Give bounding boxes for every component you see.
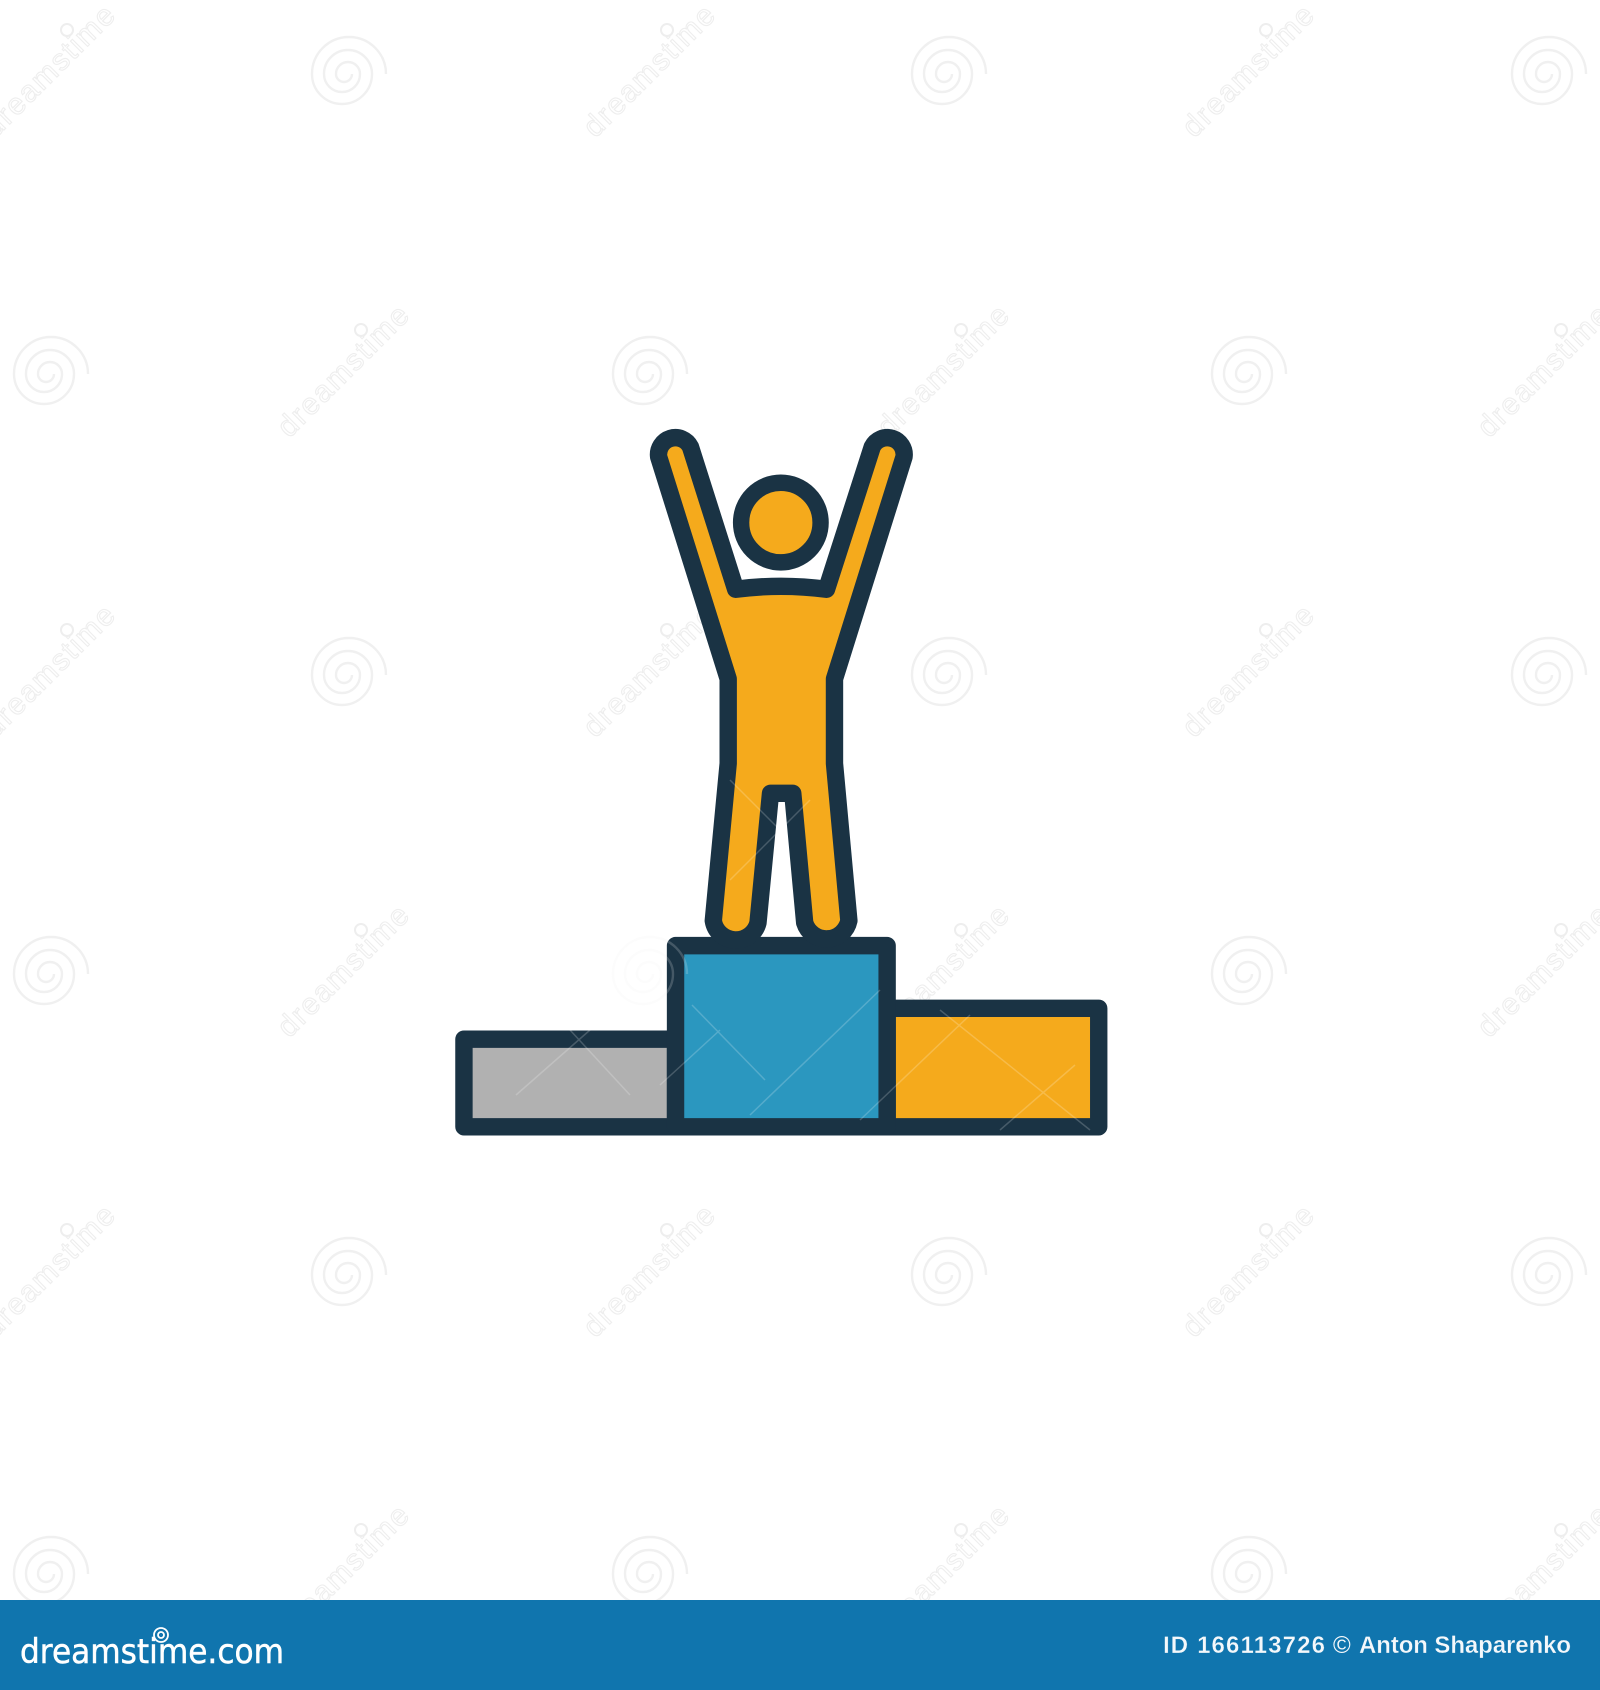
podium step: centre blue xyxy=(676,946,887,1127)
watermark pattern: dreamstime xyxy=(871,1499,1016,1644)
watermark pattern: dreamstime xyxy=(271,1499,416,1644)
podium step: left grey xyxy=(464,1039,676,1127)
watermark overlay on icon xyxy=(516,780,1090,1130)
figure head xyxy=(741,483,821,562)
watermark pattern: dreamstime xyxy=(871,899,1016,1044)
watermark pattern: dreamstime xyxy=(577,599,722,744)
icon: winner on podium xyxy=(464,438,1099,1127)
watermark pattern: dreamstime xyxy=(871,299,1016,444)
watermark pattern: dreamstime xyxy=(271,899,416,1044)
footer credit: ID 166113726 xyxy=(1163,1632,1325,1659)
icon: logo spiral xyxy=(154,1628,168,1642)
footer credit xyxy=(1163,1632,1571,1659)
watermark pattern: dreamstime xyxy=(1176,0,1321,144)
footer logo: dreamstime.com: dreamstime.com xyxy=(20,1632,284,1672)
figure body xyxy=(658,438,904,940)
footer credit: © xyxy=(1333,1632,1351,1659)
watermark pattern: dreamstime xyxy=(577,0,722,144)
podium step: right orange xyxy=(887,1008,1099,1127)
watermark pattern: dreamstime xyxy=(1176,599,1321,744)
footer bar xyxy=(0,1600,1600,1690)
footer credit: Anton Shaparenko xyxy=(1359,1632,1571,1659)
watermark pattern: dreamstime xyxy=(1176,1199,1321,1344)
watermark pattern: dreamstime xyxy=(577,1199,722,1344)
watermark pattern: dreamstime xyxy=(271,299,416,444)
